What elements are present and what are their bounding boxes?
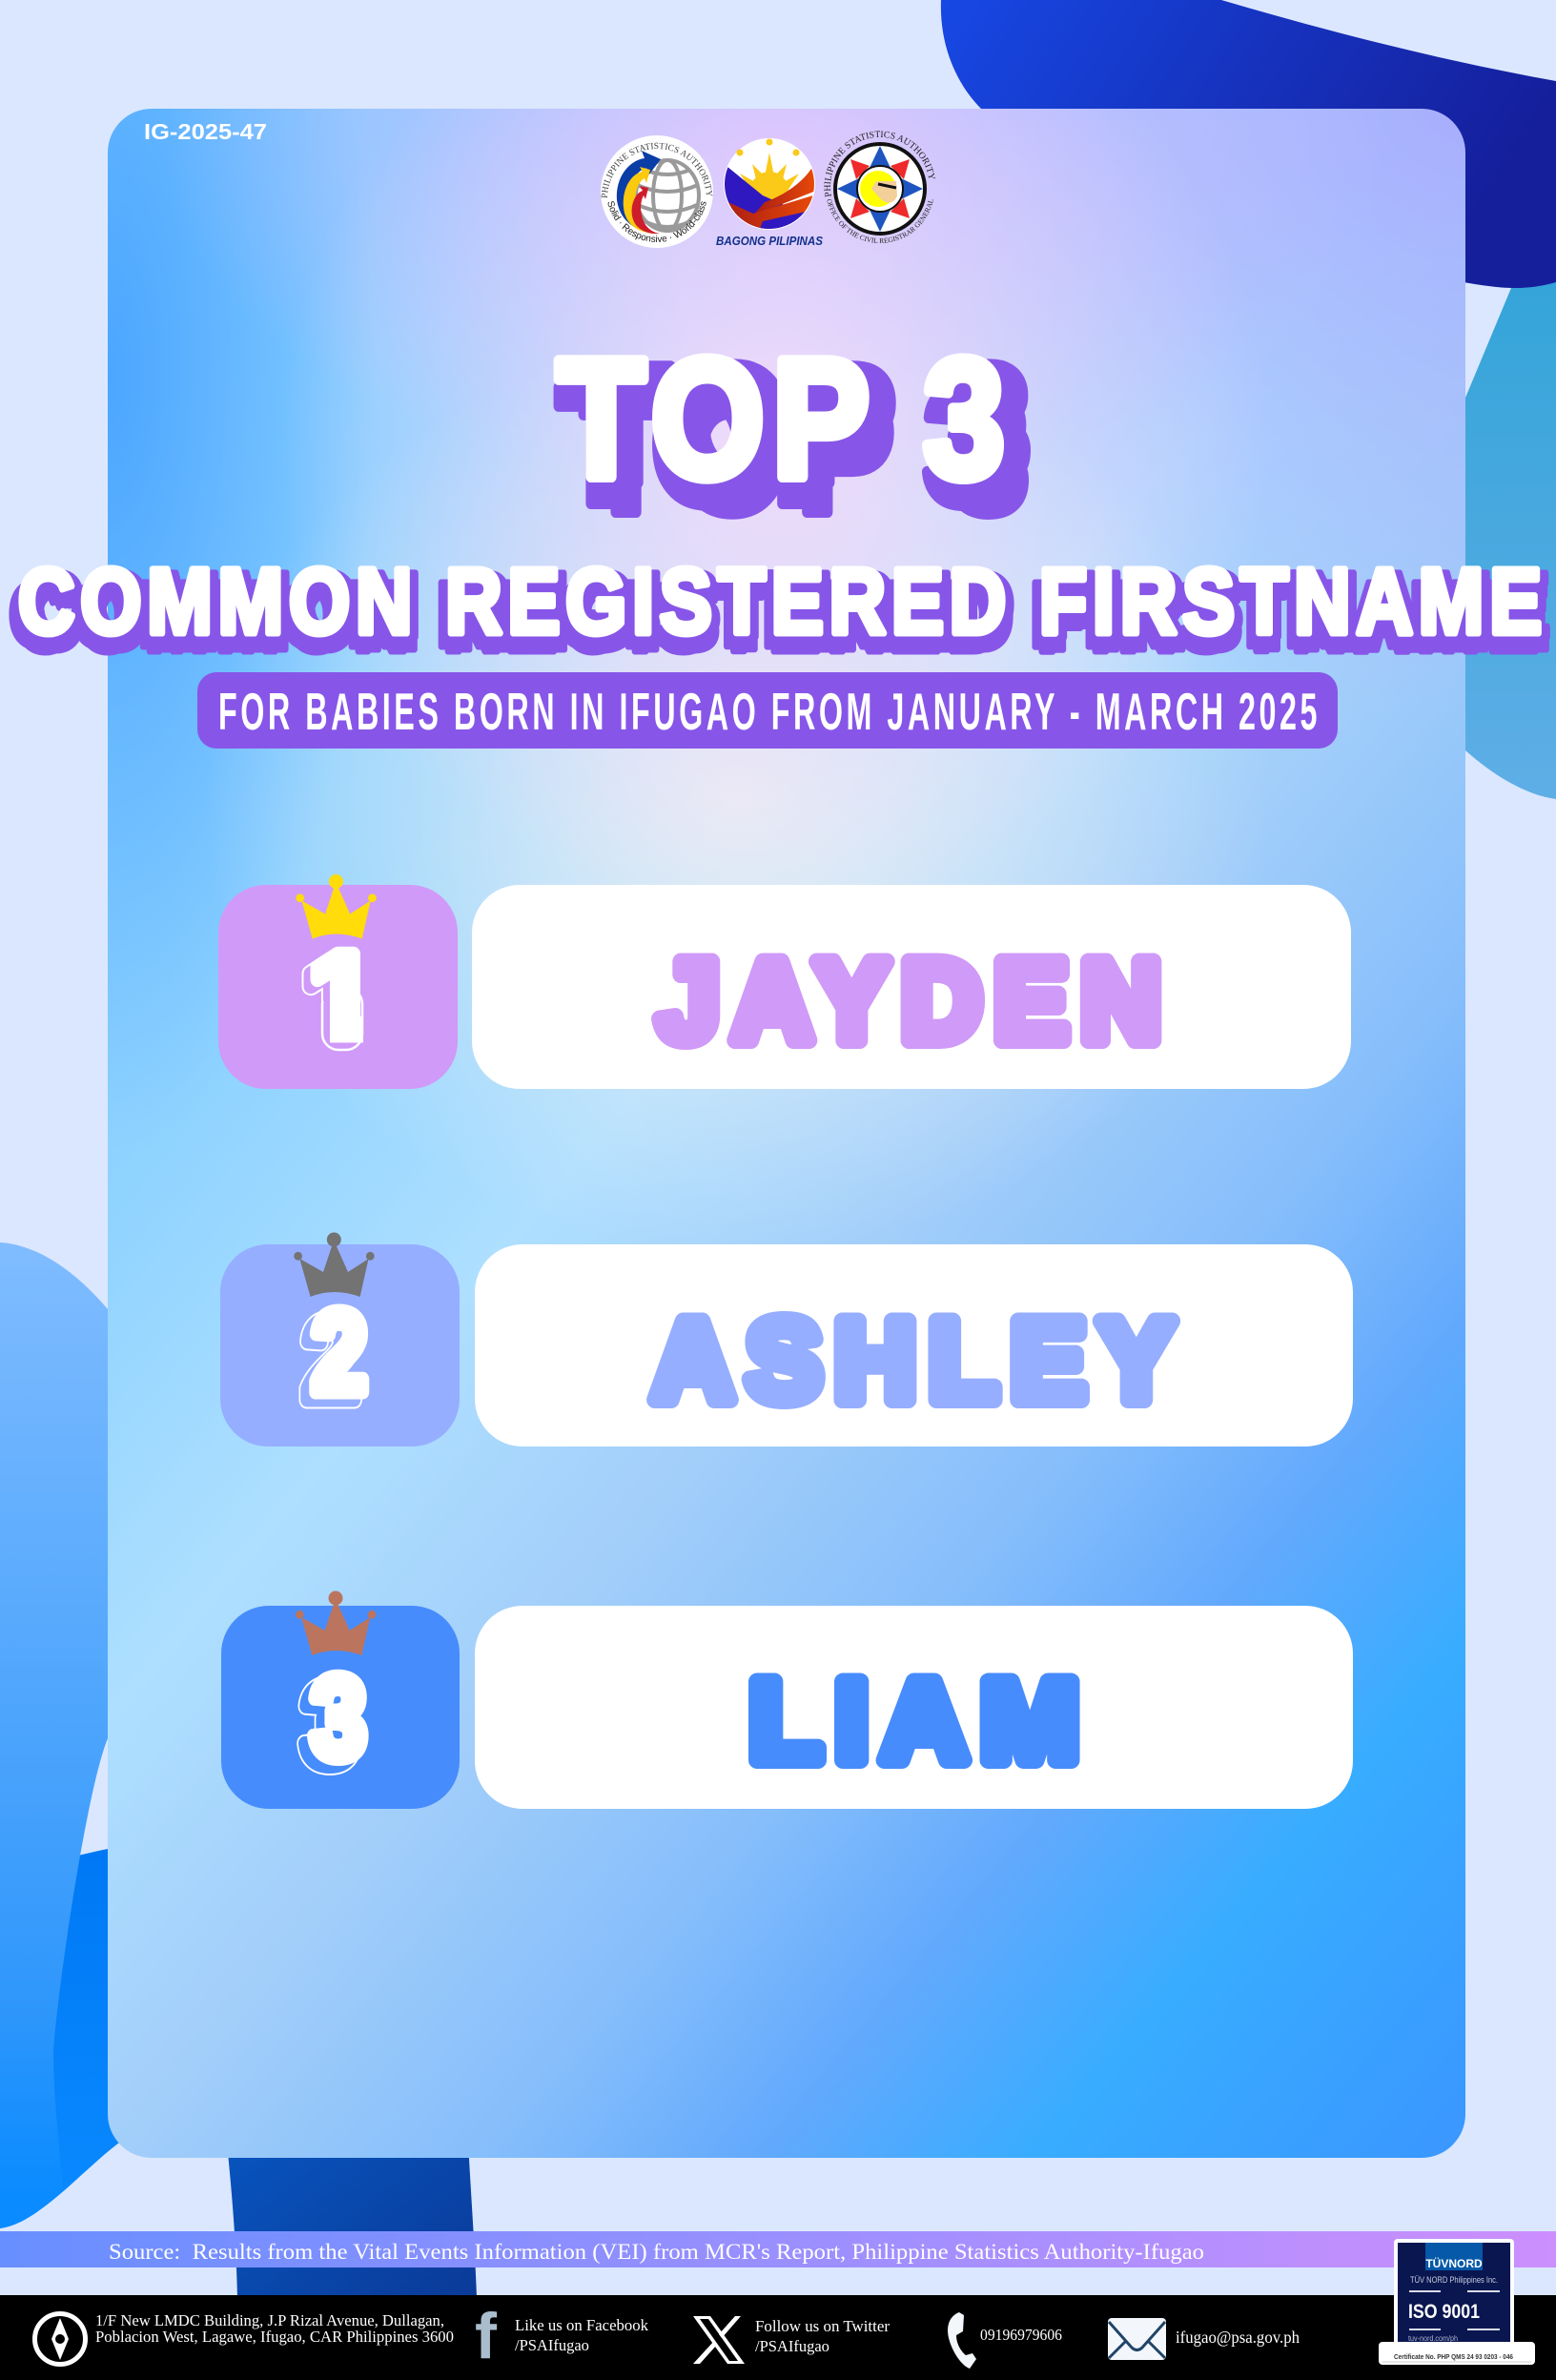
twitter text: /PSAIfugao xyxy=(755,2337,829,2355)
rank 3 name box xyxy=(475,1606,1353,1809)
ISO 9001 certification badge: Certificate No. PHP QMS 24 93 0203 - 046 xyxy=(1394,2352,1513,2361)
rank 1 badge xyxy=(218,885,458,1089)
number 3: 3 xyxy=(302,1660,358,1790)
icon: phone xyxy=(948,2312,976,2369)
heading: TOP 3: TOP 3 xyxy=(582,359,1037,548)
twitter text: Follow us on Twitter xyxy=(755,2317,891,2335)
rank 2 badge xyxy=(220,1244,460,1446)
heading: TOP 3: TOP 3 xyxy=(584,330,1039,519)
number 1: 1 xyxy=(303,936,368,1068)
logos row xyxy=(601,131,935,248)
rank 2 name box xyxy=(475,1244,1353,1446)
icon: facebook: f xyxy=(475,2300,497,2372)
name: Liam: LIAM xyxy=(749,1657,1093,1785)
logo: Bagong Pilipinas: BAGONG PILIPINAS xyxy=(716,234,823,248)
crown silver xyxy=(294,1232,375,1297)
number 3: 3 xyxy=(311,1652,366,1782)
logo: Bagong Pilipinas xyxy=(716,138,823,248)
rank 3 row xyxy=(221,1590,1353,1809)
rank 3 badge xyxy=(221,1606,460,1809)
teal blob right xyxy=(1465,267,1556,799)
crown gold xyxy=(296,874,377,938)
icon: location compass xyxy=(34,2313,86,2365)
report code: IG-2025-47 xyxy=(144,119,267,144)
number 2: 2 xyxy=(303,1295,358,1425)
ISO 9001 certification badge xyxy=(1379,2239,1535,2365)
crown bronze xyxy=(296,1590,376,1655)
rank 1 row xyxy=(218,874,1351,1089)
address: 1/F New LMDC Building, J.P Rizal Avenue, Dullagan, xyxy=(95,2311,444,2329)
main gradient card xyxy=(108,109,1465,2158)
logo: Office of the Civil Registrar General: OFFICE OF THE CIVIL REGISTRAR GENERAL xyxy=(828,198,933,243)
number 3: 3 xyxy=(302,1660,358,1790)
heading: TOP 3: TOP 3 xyxy=(557,324,1013,513)
name: Jayden: JAYDEN xyxy=(658,937,1174,1065)
icon: X xyxy=(693,2316,745,2364)
ISO 9001 certification badge: ISO 9001 xyxy=(1408,2301,1480,2323)
rank 1 name box xyxy=(472,885,1351,1089)
name: Ashley: ASHLEY xyxy=(652,1297,1187,1425)
icon: mail xyxy=(1108,2318,1166,2360)
number 2: 2 xyxy=(312,1287,367,1417)
ISO 9001 certification badge: tuv-nord.com/ph xyxy=(1408,2333,1458,2343)
facebook text: Like us on Facebook xyxy=(515,2316,649,2334)
dark blue blob top right xyxy=(941,0,1556,288)
logo: Philippine Statistics Authority: Solid · Responsive · World-class xyxy=(608,201,706,242)
subtitle badge xyxy=(197,672,1338,749)
heading: TOP 3: TOP 3 xyxy=(557,351,1013,540)
number 1: 1 xyxy=(310,930,375,1061)
source bar: Source: Results from the Vital Events Information (VEI) from MCR's Report, Philippine Statistics Authority-Ifugao xyxy=(109,2240,1204,2264)
logo: Philippine Statistics Authority xyxy=(601,135,713,248)
number 2: 2 xyxy=(303,1295,358,1425)
number 1: 1 xyxy=(303,936,368,1068)
footer xyxy=(0,2239,1556,2380)
upper left light blob xyxy=(0,1242,191,2228)
logo: Office of the Civil Registrar General xyxy=(824,131,935,243)
lower left blue blob xyxy=(0,1849,191,2228)
bottom vertical blue blob xyxy=(222,2098,477,2298)
logo: Office of the Civil Registrar General: PHILIPPINE STATISTICS AUTHORITY xyxy=(824,131,935,197)
address: Poblacion West, Lagawe, Ifugao, CAR Philippines 3600 xyxy=(95,2328,454,2346)
source bar xyxy=(0,2231,1556,2267)
ISO 9001 certification badge: TÜVNORD xyxy=(1425,2256,1483,2270)
phone number: 09196979606 xyxy=(980,2326,1062,2344)
email: ifugao@psa.gov.ph xyxy=(1176,2328,1300,2347)
rank 2 row xyxy=(220,1232,1353,1446)
logo: Philippine Statistics Authority: PHILIPPINE STATISTICS AUTHORITY xyxy=(601,143,713,198)
facebook text: /PSAIfugao xyxy=(515,2336,589,2354)
ISO 9001 certification badge: TÜV NORD Philippines Inc. xyxy=(1410,2275,1498,2286)
